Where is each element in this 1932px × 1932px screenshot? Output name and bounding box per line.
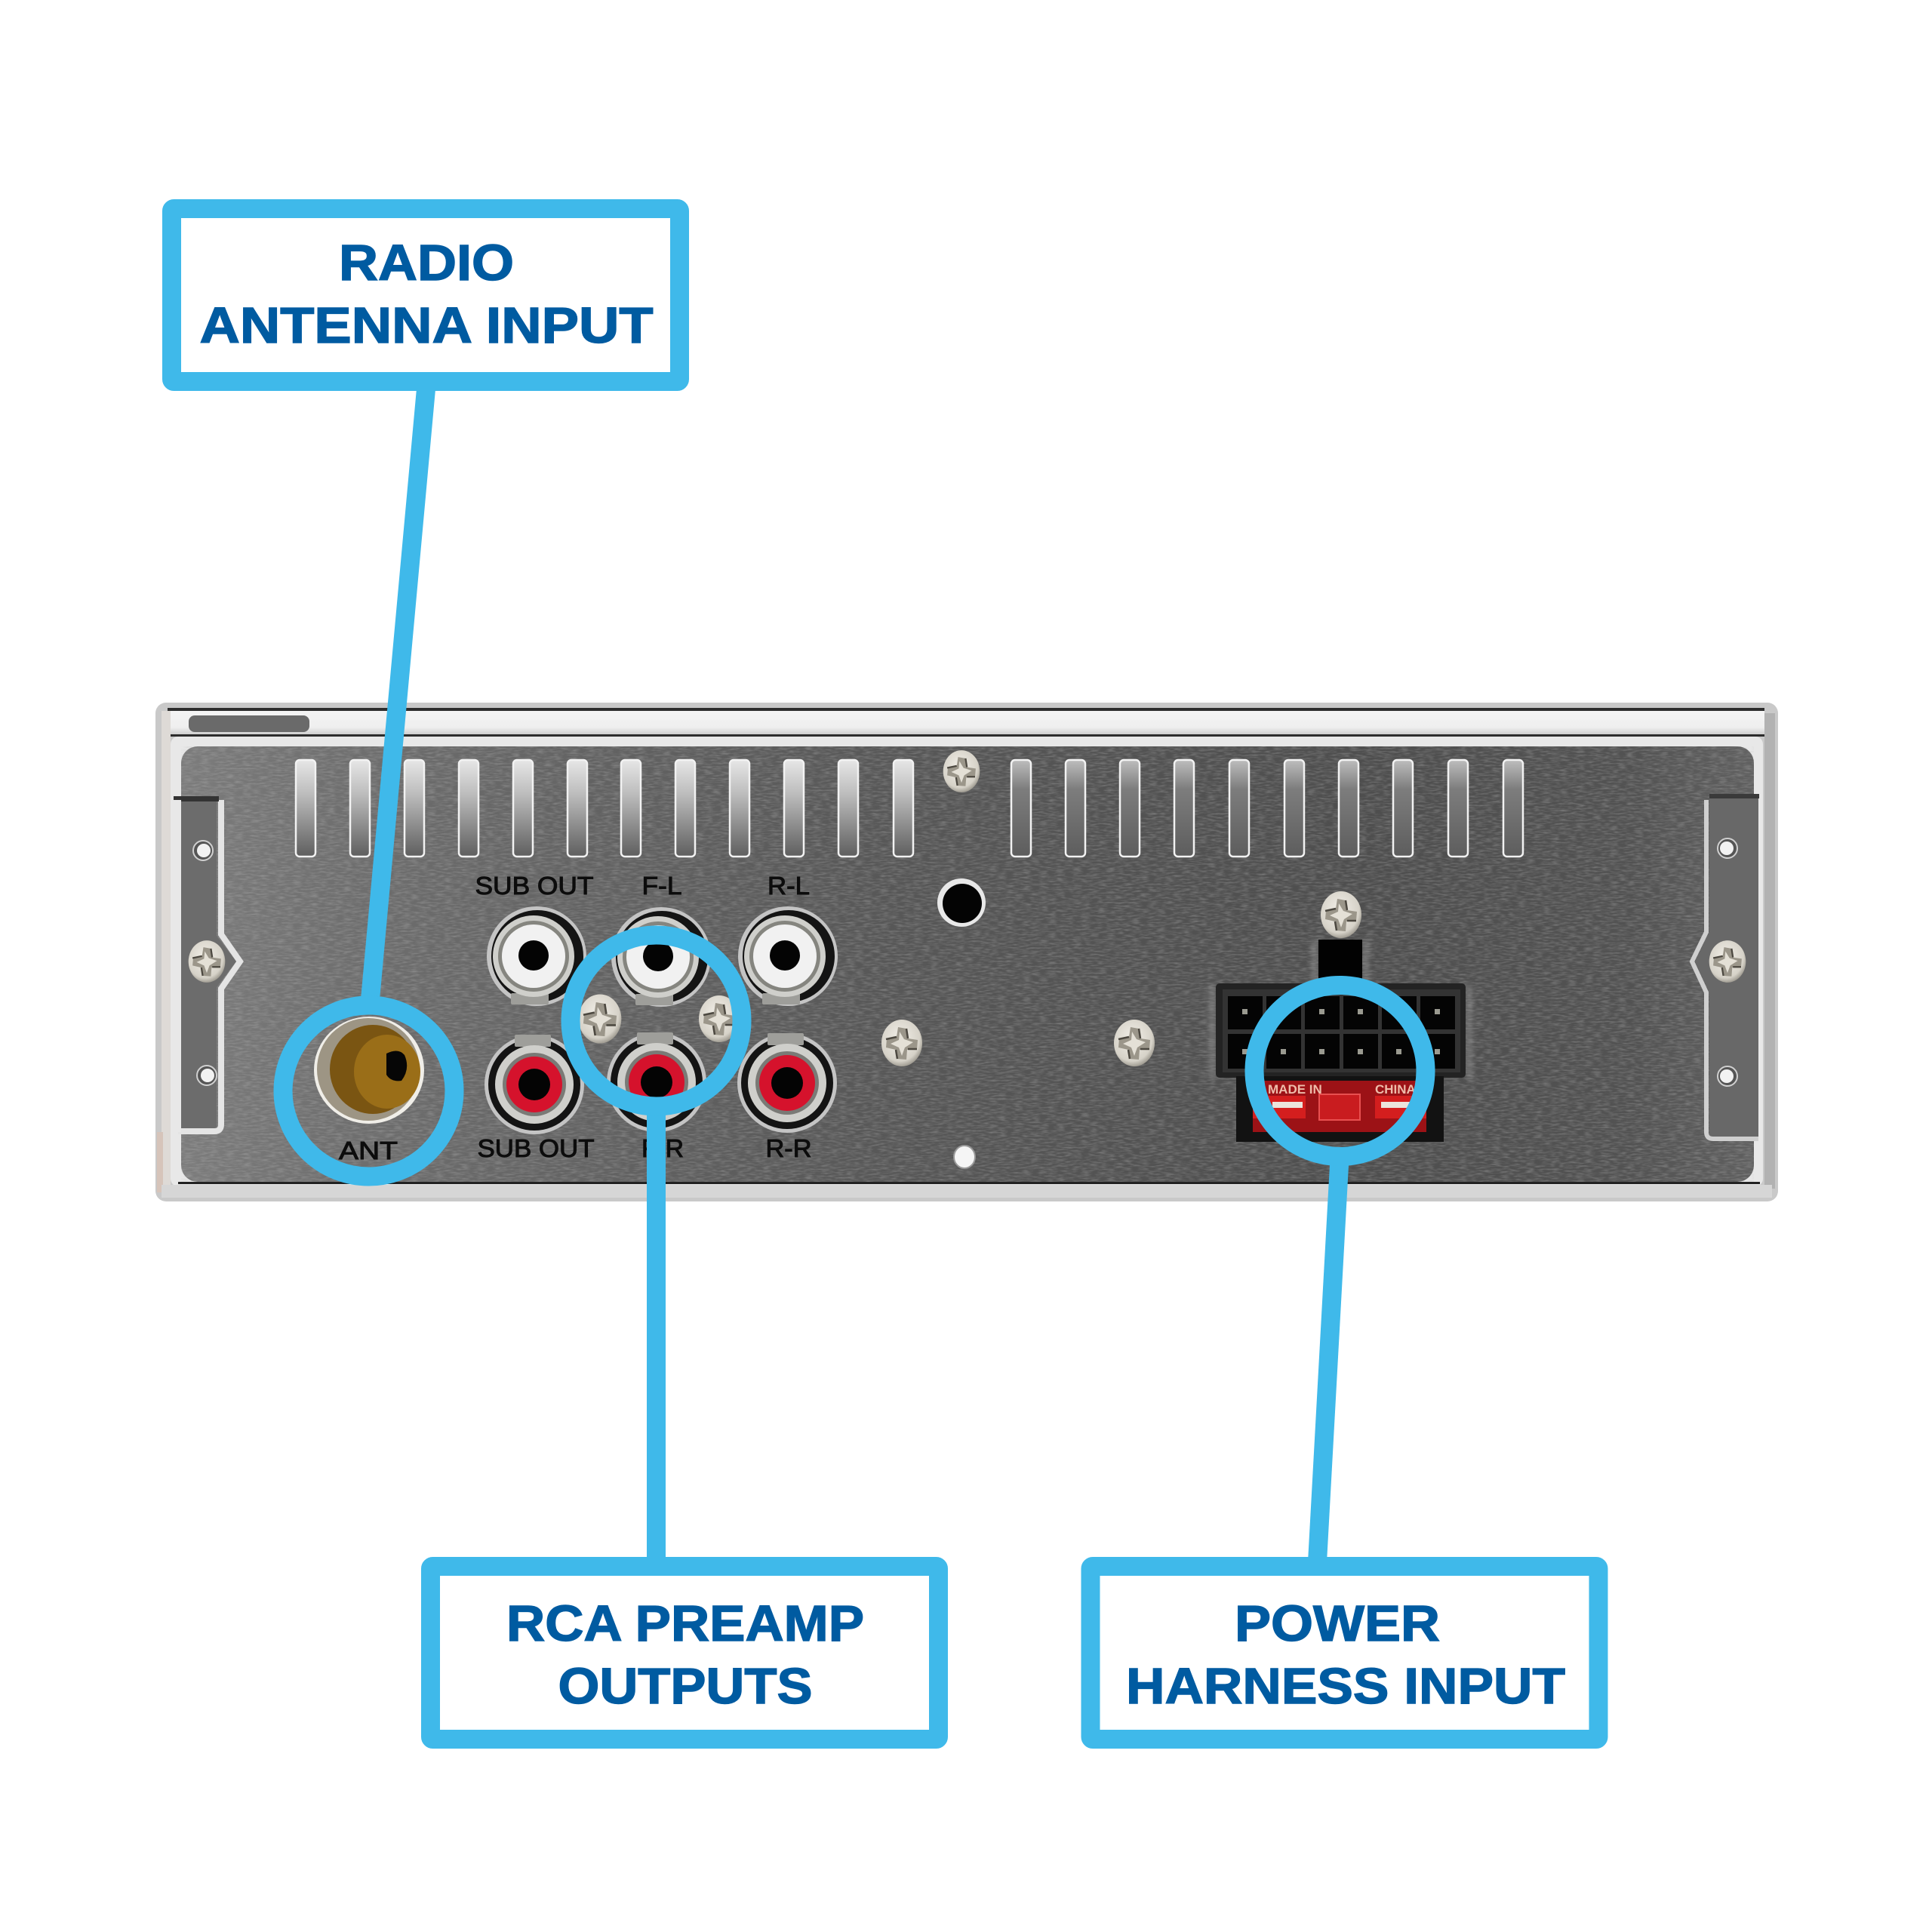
power connector and fuse: MADE IN [1268,1082,1322,1097]
silkscreen labels: ANT [339,1137,398,1164]
silkscreen labels: R-L [768,872,810,900]
power connector and fuse [1212,940,1469,1142]
callout: power harness input [1091,986,1598,1739]
highlight ring [283,1005,454,1177]
label text: RADIO [339,235,514,291]
label text: ANTENNA INPUT [199,297,654,354]
power connector and fuse: CHINA [1375,1082,1416,1097]
silkscreen labels: R-R [765,1134,812,1162]
back plate [178,746,1760,1184]
silkscreen labels: F-L [641,872,682,900]
radio chassis photo [155,703,1778,1201]
label box [172,208,679,382]
label text [199,235,654,354]
label text: RCA PREAMP [506,1595,864,1652]
label box [430,1567,939,1739]
label text: OUTPUTS [558,1658,812,1715]
silkscreen labels: F-R [641,1134,684,1162]
highlight ring [571,935,742,1106]
label box [1091,1567,1598,1739]
label text [1126,1595,1565,1715]
label text: POWER [1235,1595,1440,1652]
silkscreen labels: SUB OUT [475,872,593,900]
ventilation slots [296,760,1523,857]
connector line [647,1106,666,1562]
connector line [370,385,426,1004]
antenna port [314,1017,424,1124]
RCA jacks [485,906,838,1134]
highlight ring [1254,986,1426,1156]
top left dark strip [189,715,309,732]
callout: RCA preamp outputs [430,935,939,1739]
plate screws and holes [579,750,1361,1168]
callout: radio antenna input [172,208,679,1177]
left mounting bracket [172,796,240,1132]
silkscreen labels [339,872,812,1164]
connector line [1318,1158,1340,1562]
right mounting bracket [1692,794,1759,1139]
label text [506,1595,864,1715]
label text: HARNESS INPUT [1126,1658,1565,1715]
outer metal frame [155,703,1778,1201]
silkscreen labels: SUB OUT [477,1134,595,1162]
